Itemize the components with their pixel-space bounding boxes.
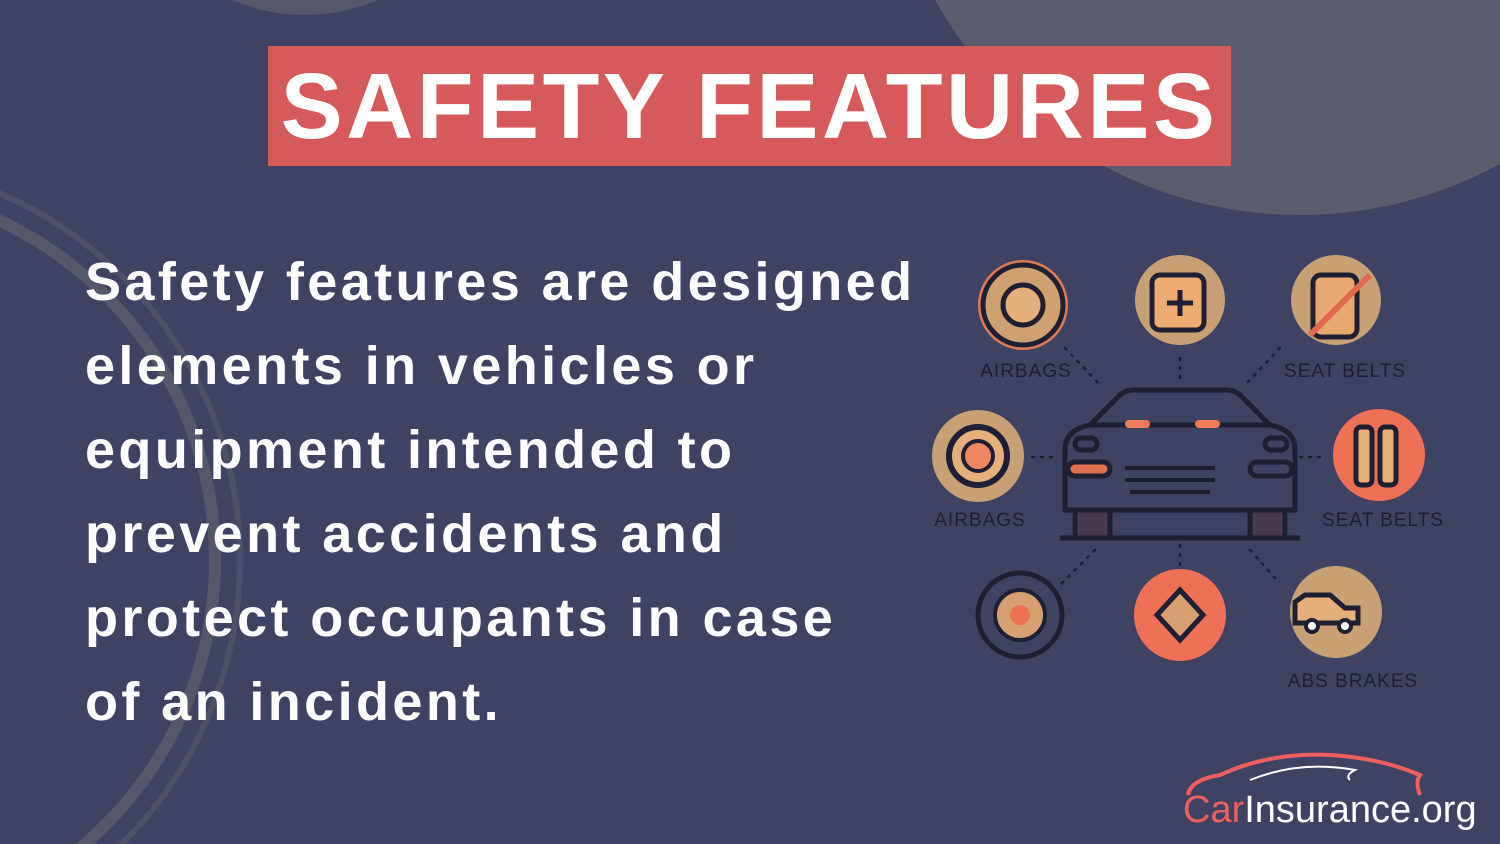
icon: seat belts right	[1333, 409, 1425, 501]
car	[1060, 390, 1300, 538]
body text: elements in vehicles or	[85, 336, 757, 396]
label: seat belts top: SEAT BELTS	[1284, 361, 1406, 382]
body text: prevent accidents and	[85, 504, 727, 564]
icon: airbags left	[932, 410, 1024, 502]
logo: CarInsurance.org	[1183, 752, 1477, 831]
logo: CarInsurance.org: CarInsurance.org	[1183, 789, 1477, 831]
illustration: car with safety icons	[932, 255, 1444, 692]
icon: steering bottom	[978, 573, 1062, 657]
label: airbags left: AIRBAGS	[934, 510, 1026, 531]
icon: seat belts top	[1291, 255, 1381, 345]
body text: Safety features are designed	[85, 252, 916, 312]
label: seat belts right: SEAT BELTS	[1322, 510, 1444, 531]
title: SAFETY FEATURES	[281, 54, 1218, 158]
body text: of an incident.	[85, 672, 502, 732]
body text: protect occupants in case	[85, 588, 836, 648]
icon: airbags steering	[978, 260, 1068, 350]
icon: abs car	[1290, 566, 1382, 658]
label: abs brakes: ABS BRAKES	[1288, 671, 1418, 692]
icon: diamond	[1134, 569, 1226, 661]
icon: first aid	[1135, 255, 1225, 345]
body text: equipment intended to	[85, 420, 735, 480]
label: airbags top: AIRBAGS	[980, 361, 1072, 382]
body text	[85, 252, 916, 732]
